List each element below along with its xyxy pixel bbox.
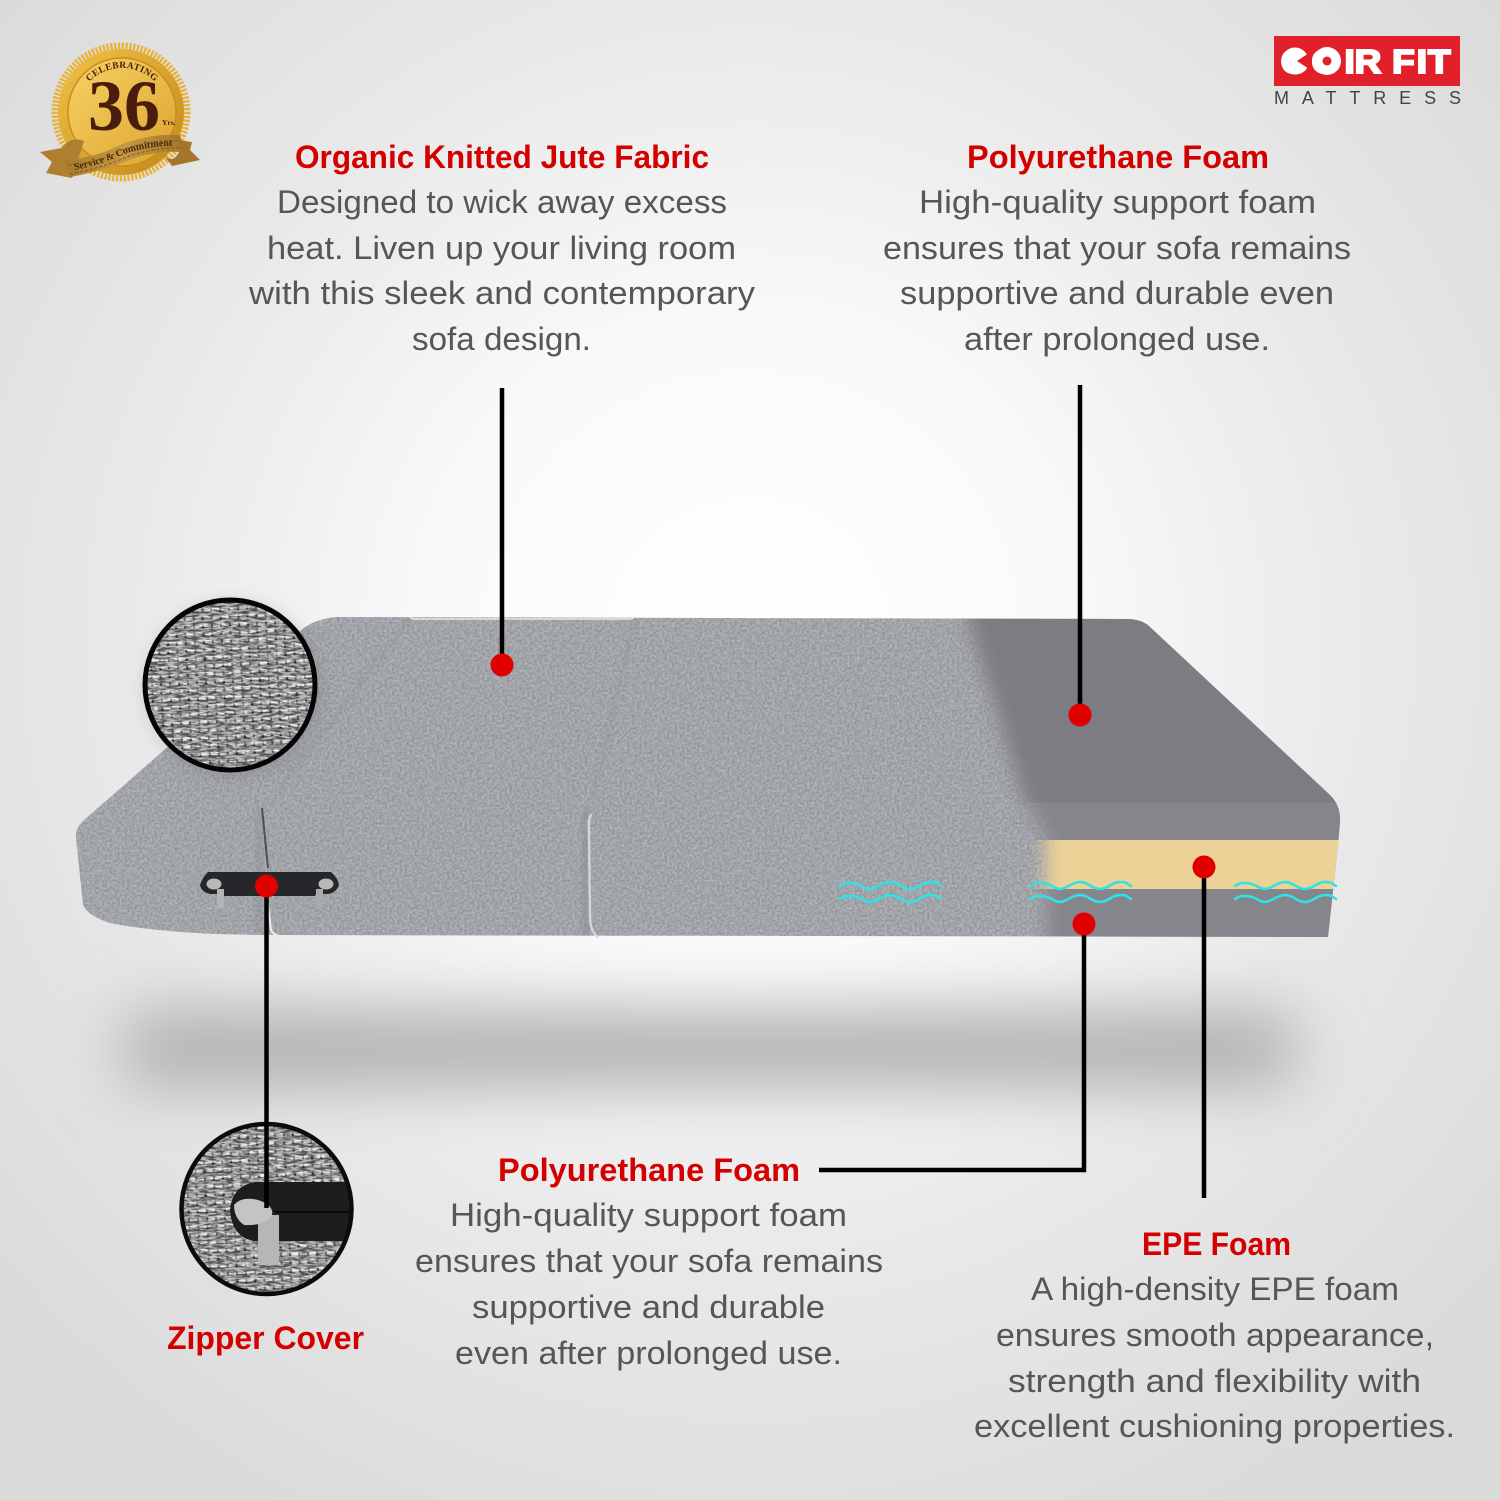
description: Designed to wick away excess — [277, 184, 727, 220]
cut-away foam layers — [960, 618, 1340, 937]
description: ensures that your sofa remains — [883, 230, 1351, 266]
heading: EPE Foam — [1142, 1226, 1291, 1262]
description: High-quality support foam — [919, 184, 1316, 220]
description — [883, 184, 1351, 357]
icon: water waves — [840, 882, 1336, 902]
icon: zipper on sofa — [200, 872, 339, 908]
description: sofa design. — [412, 321, 591, 357]
description — [415, 1197, 883, 1371]
heading: Polyurethane Foam — [498, 1152, 800, 1188]
pointer: EPE foam — [1192, 856, 1216, 1198]
description: strength and flexibility with — [1008, 1363, 1421, 1399]
description: with this sleek and contemporary — [248, 275, 755, 311]
logo: Coirfit Mattress — [1274, 36, 1461, 108]
text block: EPE foam — [974, 1226, 1455, 1444]
description: supportive and durable even — [900, 275, 1334, 311]
heading: Organic Knitted Jute Fabric — [295, 139, 709, 175]
badge: 36 years: Yrs. — [162, 118, 176, 127]
sofa shadow — [125, 1012, 1295, 1086]
fabric body — [76, 617, 1340, 937]
sofa mattress — [76, 616, 1340, 938]
fold seams — [262, 617, 635, 937]
badge: 36 years: 36 — [88, 66, 160, 146]
description: even after prolonged use. — [455, 1335, 842, 1371]
heading: zipper cover: Zipper Cover — [167, 1320, 364, 1356]
text block: top polyurethane foam — [883, 139, 1351, 357]
callout: fabric zoom circle — [140, 595, 320, 776]
pointer: bottom polyurethane foam — [819, 912, 1096, 1170]
badge: 36 years: Service & Commitment — [74, 140, 172, 170]
description — [248, 184, 755, 357]
description — [974, 1271, 1455, 1444]
heading: Polyurethane Foam — [967, 139, 1269, 175]
description: heat. Liven up your living room — [267, 230, 736, 266]
text block: organic knitted jute fabric — [248, 139, 755, 357]
badge: 36 years — [40, 42, 200, 182]
logo: Coirfit Mattress: COIRFIT — [1281, 44, 1451, 81]
description: excellent cushioning properties. — [974, 1408, 1455, 1444]
description: supportive and durable — [472, 1289, 825, 1325]
description: after prolonged use. — [964, 321, 1270, 357]
text block: bottom polyurethane foam — [415, 1152, 883, 1371]
pointer: zipper — [255, 874, 278, 1208]
callout: zipper zoom circle — [175, 1120, 360, 1300]
pointer: jute fabric — [490, 388, 514, 676]
pointer: top polyurethane foam — [1068, 385, 1092, 726]
description: A high-density EPE foam — [1031, 1271, 1399, 1307]
description: High-quality support foam — [450, 1197, 847, 1233]
logo: Coirfit Mattress: MATTRESS — [1274, 88, 1461, 108]
description: ensures that your sofa remains — [415, 1243, 883, 1279]
badge: 36 years: CELEBRATING — [86, 62, 158, 81]
description: ensures smooth appearance, — [996, 1317, 1434, 1353]
